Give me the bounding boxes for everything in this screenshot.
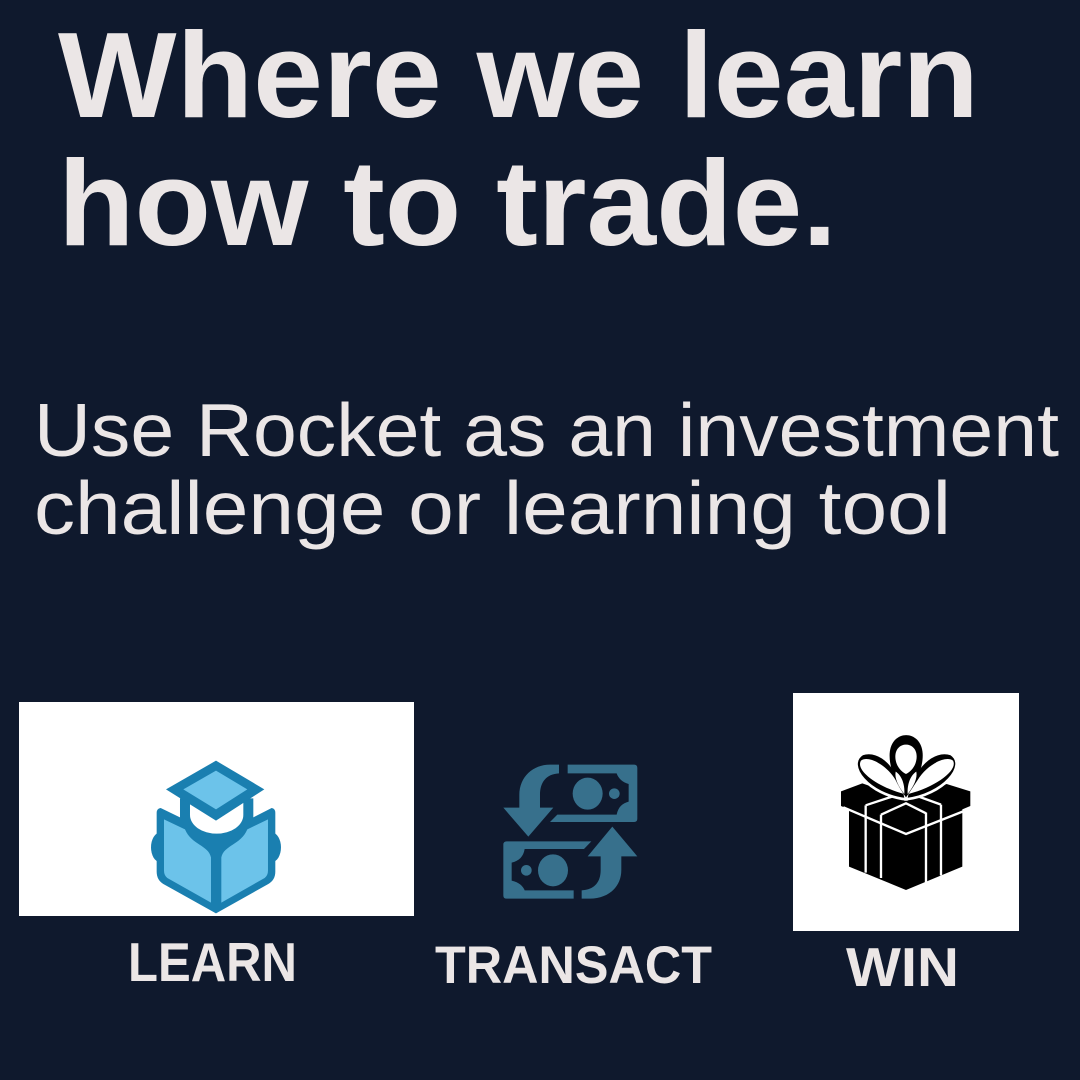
- subtitle: challenge or learning tool: [34, 466, 951, 550]
- title: how to trade.: [58, 135, 837, 271]
- subtitle: [34, 388, 1059, 550]
- panel: learn: [19, 702, 414, 916]
- panel: win: [793, 693, 1019, 931]
- icon: transact money exchange: [503, 765, 637, 899]
- subtitle: Use Rocket as an investment: [34, 388, 1059, 472]
- label: transact: TRANSACT: [435, 936, 712, 995]
- label: learn: LEARN: [128, 931, 297, 993]
- title: Where we learn: [58, 7, 979, 143]
- title: [58, 7, 979, 271]
- label: win: WIN: [846, 936, 959, 998]
- icon: gift box: [841, 735, 970, 890]
- icon: book with graduation cap: [151, 761, 281, 913]
